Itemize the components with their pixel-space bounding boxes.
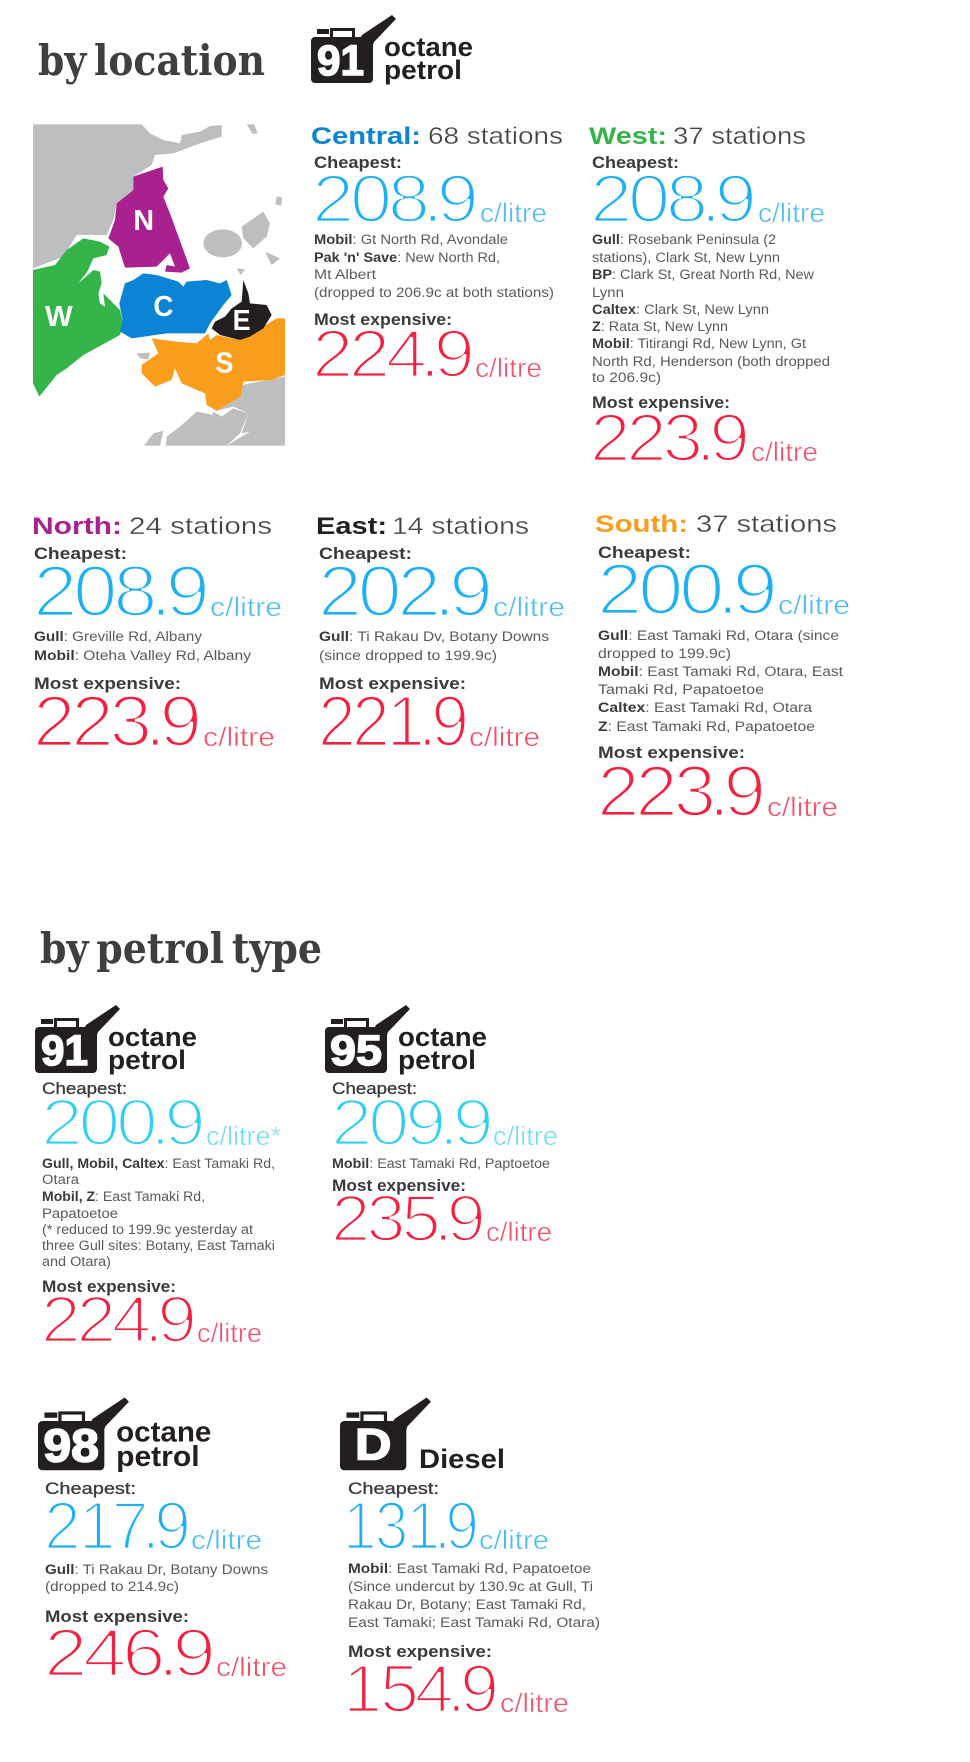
panel: 91 octane: Gull, Mobil, Caltex : East Tamaki Rd, <box>42 1156 275 1171</box>
panel: East: Cheapest: <box>319 544 412 563</box>
panel: North: 24 stations <box>129 513 272 540</box>
panel: East: c/litre <box>493 592 565 622</box>
panel: East: c/litre <box>469 722 540 752</box>
panel: Central: (dropped to 206.9c at both stations) <box>314 285 554 300</box>
panel: Diesel: Rakau Dr, Botany; East Tamaki Rd, <box>348 1597 586 1612</box>
panel: East: 221.9 <box>318 682 469 762</box>
panel: North: 223.9 <box>33 682 202 762</box>
panel: East <box>316 513 565 762</box>
icon: 91 octane petrol can: octane <box>384 32 473 62</box>
panel: 91 octane: three Gull sites: Botany, East Tamaki <box>42 1238 275 1253</box>
icon: 91 can <box>35 1005 197 1075</box>
panel: 91 octane: Cheapest: <box>42 1079 127 1098</box>
panel: Central: Mobil: Gt North Rd, Avondale <box>314 232 508 247</box>
panel: 95 octane: c/litre <box>486 1217 552 1247</box>
panel: North: Cheapest: <box>34 544 127 563</box>
panel: South: South: <box>595 511 688 538</box>
panel: West: c/litre <box>758 198 825 228</box>
map: Auckland regions: C <box>153 291 173 323</box>
icon: 95 can <box>325 1005 487 1075</box>
icon: diesel can <box>340 1397 431 1470</box>
panel: South: Z: East Tamaki Rd, Papatoetoe <box>598 719 815 734</box>
panel: West: Cheapest: <box>592 153 679 172</box>
panel: East: Most expensive: <box>319 674 466 693</box>
panel: Central: Pak 'n' Save : New North Rd, <box>314 250 500 265</box>
panel: West: to 206.9c) <box>592 370 661 385</box>
panel: Diesel: Cheapest: <box>348 1479 439 1498</box>
icon: 95 can: petrol <box>398 1045 476 1075</box>
panel: 95 octane <box>325 1005 558 1255</box>
icon: 91 octane petrol can: petrol <box>384 55 462 85</box>
heading: by location: by location <box>38 36 265 85</box>
panel: South: 200.9 <box>597 550 778 630</box>
panel: 91 octane: c/litre <box>197 1318 262 1348</box>
panel: 91 octane <box>35 1005 281 1356</box>
panel: North: Gull : Greville Rd, Albany <box>34 629 202 644</box>
panel: North <box>32 513 282 762</box>
panel: West: Gull: Rosebank Peninsula (2 <box>592 232 776 247</box>
panel: South: Caltex : East Tamaki Rd, Otara <box>598 700 813 715</box>
panel: West <box>589 123 830 476</box>
icon: 91 can: octane <box>108 1022 197 1052</box>
panel: 95 octane: Mobil: East Tamaki Rd, Paptoetoe <box>332 1156 550 1171</box>
panel: 91 octane: (* reduced to 199.9c yesterday at <box>42 1222 253 1237</box>
panel: East: Gull : Ti Rakau Dv, Botany Downs <box>319 629 549 644</box>
panel: West: Mobil: Titirangi Rd, New Lynn, Gt <box>592 336 806 351</box>
label: Diesel: Diesel <box>419 1444 505 1474</box>
icon: 98 can: octane <box>116 1416 211 1448</box>
panel: 91 octane: Otara <box>42 1172 80 1187</box>
panel: 95 octane: c/litre <box>493 1121 558 1151</box>
panel: West: c/litre <box>751 437 818 467</box>
icon: 91 can: 91 <box>41 1027 88 1075</box>
panel: Diesel: c/litre <box>500 1688 569 1718</box>
panel: 98 octane: Most expensive: <box>45 1607 189 1626</box>
panel: Central: 68 stations <box>428 123 563 150</box>
panel: 98 octane: c/litre <box>191 1525 262 1555</box>
panel: Central: 208.9 <box>312 161 479 237</box>
panel: West: Z: Rata St, New Lynn <box>592 319 728 334</box>
panel: North: c/litre <box>210 592 282 622</box>
panel: 98 octane: Gull: Ti Rakau Dr, Botany Downs <box>45 1562 268 1577</box>
panel: Central: 224.9 <box>312 316 475 392</box>
map: Auckland regions: S <box>215 348 233 380</box>
panel: 95 octane: Cheapest: <box>332 1079 417 1098</box>
icon: 95 can: 95 <box>330 1027 382 1075</box>
map: Auckland regions: W <box>45 301 73 333</box>
panel: South: Most expensive: <box>598 743 745 762</box>
panel: West: stations), Clark St, New Lynn <box>592 250 780 265</box>
panel: Central: Central: <box>311 123 421 150</box>
panel: 95 octane: 235.9 <box>331 1181 486 1255</box>
panel: South: c/litre <box>778 590 850 620</box>
panel: 95 octane: Most expensive: <box>332 1176 466 1195</box>
panel: West: West: <box>589 123 667 150</box>
panel: 91 octane: Mobil, Z: East Tamaki Rd, <box>42 1189 205 1204</box>
panel: North: Mobil : Oteha Valley Rd, Albany <box>34 648 251 663</box>
panel: Diesel: 131.9 <box>343 1488 479 1564</box>
panel: 91 octane: c/litre* <box>206 1121 281 1151</box>
panel: Central: Mt Albert <box>314 267 376 282</box>
panel: 98 octane <box>38 1397 287 1691</box>
panel: West: BP: Clark St, Great North Rd, New <box>592 267 814 282</box>
panel: West: Caltex : Clark St, New Lynn <box>592 302 769 317</box>
panel: South: 223.9 <box>597 752 766 832</box>
panel: 91 octane: 200.9 <box>41 1085 206 1159</box>
panel: Diesel <box>340 1397 600 1727</box>
panel: North: c/litre <box>203 722 275 752</box>
panel: North: 208.9 <box>33 552 210 632</box>
panel: South: Cheapest: <box>598 543 691 562</box>
panel: 91 octane: Papatoetoe <box>42 1206 118 1221</box>
panel: East: (since dropped to 199.9c) <box>319 648 497 663</box>
panel: Diesel: Most expensive: <box>348 1642 492 1661</box>
icon: 95 can: octane <box>398 1022 487 1052</box>
panel: West: 208.9 <box>590 161 757 237</box>
panel: Diesel: (Since undercut by 130.9c at Gull, Ti <box>348 1579 593 1594</box>
panel: West: Lynn <box>592 285 624 300</box>
panel: South: c/litre <box>767 792 838 822</box>
panel: Central: Cheapest: <box>314 153 402 172</box>
icon: 91 octane petrol can <box>311 15 473 85</box>
map: Auckland regions: E <box>233 305 251 337</box>
map: Auckland regions <box>33 124 285 446</box>
panel: Central: c/litre <box>475 353 542 383</box>
panel: Diesel: East Tamaki; East Tamaki Rd, Otara) <box>348 1615 600 1630</box>
panel: South <box>595 511 850 832</box>
icon: diesel can: D <box>355 1419 391 1470</box>
panel: 98 octane: 246.9 <box>44 1615 216 1691</box>
map: Auckland regions: N <box>133 205 154 237</box>
panel: East: East: <box>316 513 387 540</box>
icon: 98 can: 98 <box>43 1420 99 1472</box>
panel: South: dropped to 199.9c) <box>598 646 731 661</box>
icon: 98 can <box>38 1397 211 1473</box>
icon: 91 can: petrol <box>108 1045 186 1075</box>
panel: 95 octane: 209.9 <box>331 1085 494 1159</box>
panel: 98 octane: c/litre <box>216 1652 287 1682</box>
panel: 98 octane: (dropped to 214.9c) <box>45 1579 179 1594</box>
panel: Diesel: c/litre <box>479 1525 549 1555</box>
panel: Diesel: Mobil : East Tamaki Rd, Papatoetoe <box>348 1561 591 1576</box>
panel: Central: Most expensive: <box>314 310 452 329</box>
panel: South: Gull : East Tamaki Rd, Otara (since <box>598 628 839 643</box>
panel: West: 37 stations <box>673 123 806 150</box>
panel: West: North Rd, Henderson (both dropped <box>592 354 830 369</box>
panel: 98 octane: Cheapest: <box>45 1479 136 1498</box>
panel: West: 223.9 <box>590 400 750 476</box>
panel: 91 octane: and Otara) <box>42 1254 111 1269</box>
panel: East: 202.9 <box>318 552 493 632</box>
panel: 91 octane: 224.9 <box>41 1282 197 1356</box>
icon: 98 can: petrol <box>116 1441 200 1473</box>
panel: Diesel: 154.9 <box>343 1651 499 1727</box>
panel: 91 octane: Most expensive: <box>42 1277 176 1296</box>
panel: North: Most expensive: <box>34 674 181 693</box>
panel: 98 octane: 217.9 <box>44 1488 191 1564</box>
icon: 91 octane petrol can: 91 <box>317 37 364 85</box>
panel: North: North: <box>32 513 122 540</box>
panel: South: Tamaki Rd, Papatoetoe <box>598 682 764 697</box>
heading: by petrol type: by petrol type <box>40 924 322 973</box>
panel: Central <box>311 123 563 392</box>
panel: East: 14 stations <box>392 513 529 540</box>
panel: West: Most expensive: <box>592 393 730 412</box>
panel: South: Mobil : East Tamaki Rd, Otara, East <box>598 664 843 679</box>
panel: South: 37 stations <box>696 511 837 538</box>
panel: Central: c/litre <box>480 198 547 228</box>
